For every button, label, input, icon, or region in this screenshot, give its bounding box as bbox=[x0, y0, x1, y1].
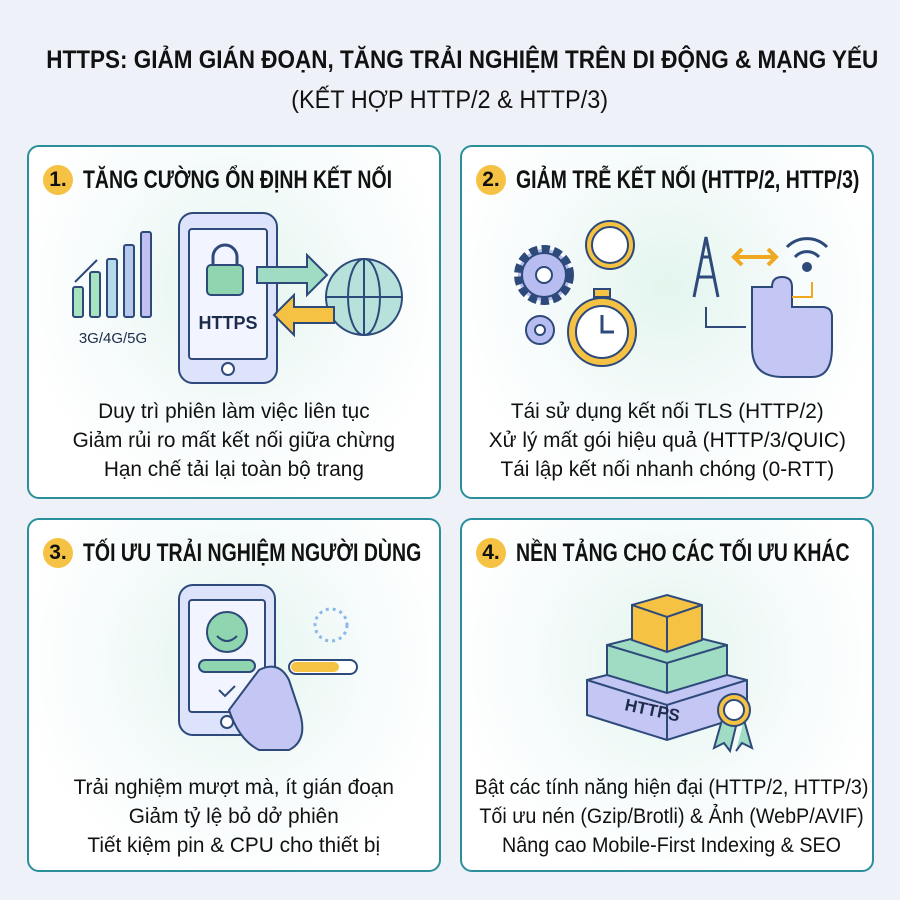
heading 1: 1. bbox=[49, 168, 67, 191]
illustration: phone, signal, globe: 3G/4G/5G bbox=[79, 330, 147, 347]
illustration: stacked blocks with badge: HTTPS bbox=[623, 695, 682, 726]
illustration: stacked blocks with badge bbox=[586, 594, 754, 754]
panel: connection stability bbox=[27, 145, 441, 499]
illustration: phone, signal, globe bbox=[72, 212, 403, 384]
panel: foundation bbox=[460, 518, 874, 872]
title: HTTPS: GIẢM GIÁN ĐOẠN, TĂNG TRẢI NGHIỆM TRÊN DI ĐỘNG & MẠNG YẾU bbox=[46, 46, 878, 74]
heading 4: NỀN TẢNG CHO CÁC TỐI ƯU KHÁC bbox=[516, 538, 850, 566]
heading 1: TĂNG CƯỜNG ỔN ĐỊNH KẾT NỐI bbox=[83, 166, 392, 194]
text block 2: Xử lý mất gói hiệu quả (HTTP/3/QUIC) bbox=[488, 429, 846, 452]
panel: user experience bbox=[27, 518, 441, 872]
text block 1: Hạn chế tải lại toàn bộ trang bbox=[104, 458, 364, 481]
text block 3: Giảm tỷ lệ bỏ dở phiên bbox=[129, 805, 339, 828]
text block 3: Trải nghiệm mượt mà, ít gián đoạn bbox=[74, 776, 394, 799]
text block 1: Duy trì phiên làm việc liên tục bbox=[98, 400, 370, 423]
text block 4: Tối ưu nén (Gzip/Brotli) & Ảnh (WebP/AVIF) bbox=[479, 805, 864, 828]
heading 2: GIẢM TRỄ KẾT NỐI (HTTP/2, HTTP/3) bbox=[516, 166, 859, 194]
text block 1 bbox=[73, 400, 395, 481]
text block 2: Tái sử dụng kết nối TLS (HTTP/2) bbox=[511, 400, 823, 423]
text block 4: Nâng cao Mobile-First Indexing & SEO bbox=[502, 834, 841, 857]
panel: latency bbox=[460, 145, 874, 499]
text block 4 bbox=[475, 776, 868, 857]
illustration: phone, signal, globe: HTTPS bbox=[198, 313, 258, 333]
text block 2: Tái lập kết nối nhanh chóng (0-RTT) bbox=[500, 458, 834, 481]
text block 1: Giảm rủi ro mất kết nối giữa chừng bbox=[73, 429, 395, 452]
heading 4: 4. bbox=[482, 541, 500, 564]
heading 3: TỐI ƯU TRẢI NGHIỆM NGƯỜI DÙNG bbox=[83, 538, 421, 566]
text block 4: Bật các tính năng hiện đại (HTTP/2, HTTP/3) bbox=[475, 776, 868, 799]
text block 3: Tiết kiệm pin & CPU cho thiết bị bbox=[88, 834, 380, 857]
heading 3: 3. bbox=[49, 541, 67, 564]
text block 2 bbox=[488, 400, 846, 481]
illustration: gears, clocks, tower, hand bbox=[514, 220, 833, 378]
heading 2: 2. bbox=[482, 168, 500, 191]
subtitle: (KẾT HỢP HTTP/2 & HTTP/3) bbox=[291, 86, 608, 114]
text block 3 bbox=[74, 776, 394, 857]
illustration: phone with smiley, loading bar bbox=[178, 584, 358, 751]
